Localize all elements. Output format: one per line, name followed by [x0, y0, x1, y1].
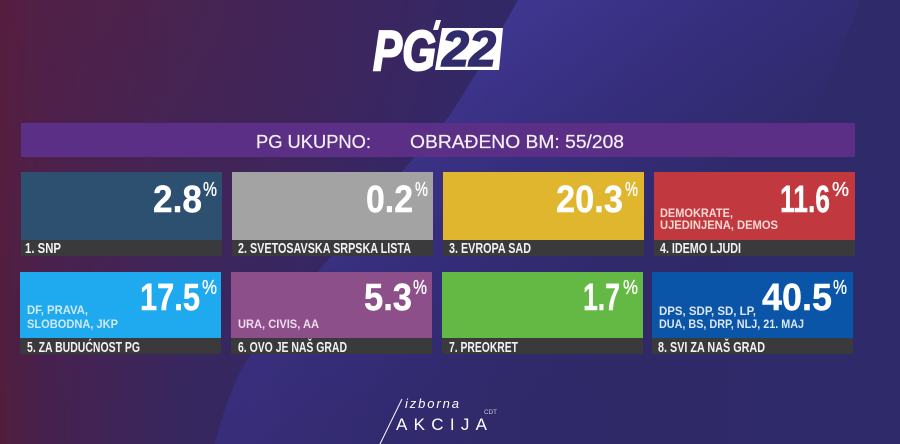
card 4: Idemo ljudi — [654, 172, 855, 257]
card 2: Svetosavska srpska lista: 2. SVETOSAVSKA SRPSKA LISTA — [238, 240, 411, 257]
card 3: Evropa sad: 3. EVROPA SAD — [449, 240, 531, 257]
card 5: Za budućnost PG: SLOBODNA, JKP — [27, 319, 118, 331]
card 1: SNP: % — [203, 179, 217, 201]
logo: Izborna akcija CDT — [380, 396, 497, 444]
card 6: Ovo je naš grad: URA, CIVIS, AA — [238, 319, 319, 331]
card 2: Svetosavska srpska lista: 0.2 — [366, 179, 413, 221]
logo: PG'22: PG — [373, 19, 436, 83]
card 8: Svi za naš grad: % — [833, 277, 847, 299]
logo: Izborna akcija CDT: CDT — [484, 410, 497, 416]
card 7: Preokret: 1.7 — [583, 277, 620, 319]
card 4: Idemo ljudi: 11.6 — [780, 179, 830, 221]
card 8: Svi za naš grad: 40.5 — [762, 277, 832, 319]
card 6: Ovo je naš grad: % — [413, 277, 427, 299]
card 7: Preokret — [442, 272, 643, 356]
card 5: Za budućnost PG: 17.5 — [140, 277, 200, 319]
card 6: Ovo je naš grad: 6. OVO JE NAŠ GRAD — [238, 338, 347, 356]
logo: Izborna akcija CDT: izborna — [405, 396, 459, 411]
card 3: Evropa sad: % — [625, 179, 638, 201]
card 5: Za budućnost PG: 5. ZA BUDUĆNOST PG — [27, 338, 140, 356]
card 3: Evropa sad: 20.3 — [556, 179, 623, 221]
card 6: Ovo je naš grad — [231, 272, 432, 356]
card 7: Preokret: % — [623, 277, 638, 299]
card 1: SNP: 1. SNP — [25, 240, 61, 257]
card 8: Svi za naš grad: DUA, BS, DRP, NLJ, 21. MAJ — [659, 319, 804, 331]
card 5: Za budućnost PG: % — [202, 277, 217, 299]
card 4: Idemo ljudi: UJEDINJENA, DEMOS — [660, 220, 778, 232]
logo: PG'22 — [373, 19, 503, 83]
logo: Izborna akcija CDT: AKCIJA — [396, 415, 488, 434]
card 1: SNP — [21, 172, 222, 257]
card 5: Za budućnost PG: DF, PRAVA, — [27, 305, 88, 317]
card 4: Idemo ljudi: % — [832, 179, 849, 201]
card 7: Preokret: 7. PREOKRET — [449, 339, 518, 356]
card 2: Svetosavska srpska lista — [232, 172, 433, 257]
card 8: Svi za naš grad: 8. SVI ZA NAŠ GRAD — [658, 338, 765, 356]
card 1: SNP: 2.8 — [153, 179, 202, 221]
header bar: PG ukupno, obrađeno BM: PG UKUPNO: — [256, 132, 371, 152]
card 4: Idemo ljudi: 4. IDEMO LJUDI — [660, 240, 741, 257]
logo: PG'22: 22 — [441, 21, 496, 77]
card 6: Ovo je naš grad: 5.3 — [364, 277, 412, 319]
card 4: Idemo ljudi: DEMOKRATE, — [660, 208, 733, 220]
card 2: Svetosavska srpska lista: % — [415, 179, 428, 201]
header bar: PG ukupno, obrađeno BM — [21, 123, 855, 157]
card 3: Evropa sad — [443, 172, 644, 257]
header bar: PG ukupno, obrađeno BM: OBRAĐENO BM: 55/208 — [410, 132, 624, 152]
card 8: Svi za naš grad: DPS, SDP, SD, LP, — [659, 306, 756, 318]
card 5: Za budućnost PG — [20, 272, 221, 356]
card 8: Svi za naš grad — [652, 272, 853, 356]
